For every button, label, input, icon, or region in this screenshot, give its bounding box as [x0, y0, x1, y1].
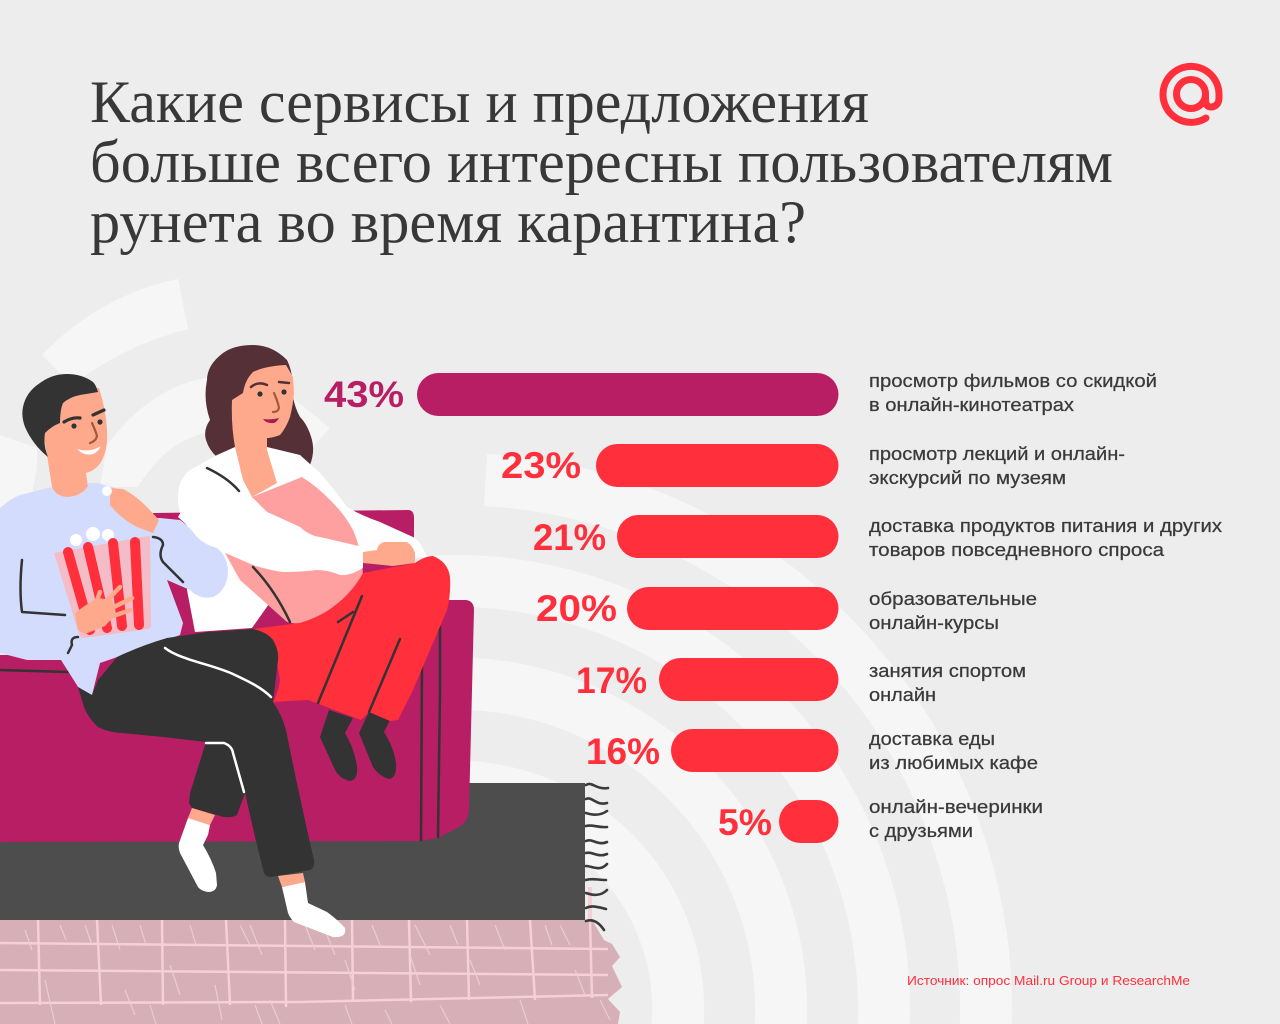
- bar row: 20%: [536, 587, 1037, 633]
- background arcs: [0, 279, 986, 1024]
- man: popcorn box: [54, 527, 151, 638]
- bar row: 43%: [324, 370, 1157, 416]
- bar row: 23%: экскурсий по музеям: [869, 467, 1066, 488]
- bar row: 16%: [586, 728, 1038, 773]
- rug: pink floor carpet: [0, 887, 622, 1024]
- man: neck and face: [44, 388, 107, 497]
- woman: hand: [363, 542, 415, 566]
- bar row: 43%: 43%: [324, 373, 404, 415]
- man: hair: [22, 374, 98, 457]
- bar row: 17%: занятия спортом: [869, 660, 1026, 681]
- rug: dark blanket with fringe: [0, 783, 608, 930]
- woman: feet: [320, 710, 396, 781]
- woman: red trousers: [253, 556, 450, 721]
- title: рунета во время карантина?: [90, 189, 806, 255]
- woman: white shirt: [178, 447, 427, 632]
- man: facial features: [64, 410, 104, 454]
- sofa: [0, 510, 474, 842]
- woman: sleeve: [178, 480, 363, 575]
- man: black trousers: [78, 629, 314, 877]
- bar row: 5%: онлайн-вечеринки: [869, 796, 1043, 817]
- bar row: 43%: просмотр фильмов со скидкой: [869, 370, 1157, 391]
- woman: pillow: [225, 477, 363, 623]
- bar row: 16%: 16%: [586, 730, 660, 772]
- bar row: 16%: доставка еды: [869, 728, 995, 749]
- bar row: 17%: [576, 658, 1026, 705]
- woman: neck and face: [232, 365, 294, 497]
- icon: at-sign logo: [1163, 66, 1219, 122]
- woman: facial features: [251, 382, 289, 423]
- bar row: 20%: образовательные: [869, 588, 1037, 609]
- bar row: 43%: в онлайн-кинотеатрах: [869, 394, 1075, 415]
- source note: Источник: опрос Mail.ru Group и ResearchMe: [907, 973, 1190, 988]
- bar row: 5%: с друзьями: [869, 820, 973, 841]
- bar row: 21%: доставка продуктов питания и других: [869, 515, 1223, 536]
- bar row: 20%: онлайн-курсы: [869, 612, 999, 633]
- man: sweater: [0, 483, 228, 695]
- bar row: 23%: просмотр лекций и онлайн-: [869, 443, 1125, 464]
- title: больше всего интересны пользователям: [90, 129, 1113, 195]
- bar row: 20%: 20%: [536, 587, 617, 629]
- man: hand on box: [75, 587, 132, 634]
- illustration: couple on a sofa: [0, 345, 622, 1024]
- bar row: 16%: из любимых кафе: [869, 752, 1038, 773]
- bar row: 23%: [501, 443, 1125, 488]
- bar row: 23%: 23%: [501, 444, 581, 486]
- bar row: 17%: 17%: [576, 659, 647, 701]
- title: Какие сервисы и предложения: [90, 69, 869, 135]
- bar row: 21%: [533, 515, 1223, 560]
- man: feet and socks: [179, 808, 345, 937]
- woman: [178, 345, 450, 781]
- bar row: 17%: онлайн: [869, 684, 936, 705]
- man: [0, 374, 345, 937]
- title: [90, 69, 1113, 255]
- woman: hair: [205, 345, 313, 465]
- bar row: 21%: 21%: [533, 516, 606, 558]
- bar row: 5%: 5%: [718, 801, 772, 843]
- bar row: 5%: [718, 796, 1043, 843]
- man: raised hand with popcorn: [102, 486, 159, 533]
- bar row: 21%: товаров повседневного спроса: [869, 539, 1165, 560]
